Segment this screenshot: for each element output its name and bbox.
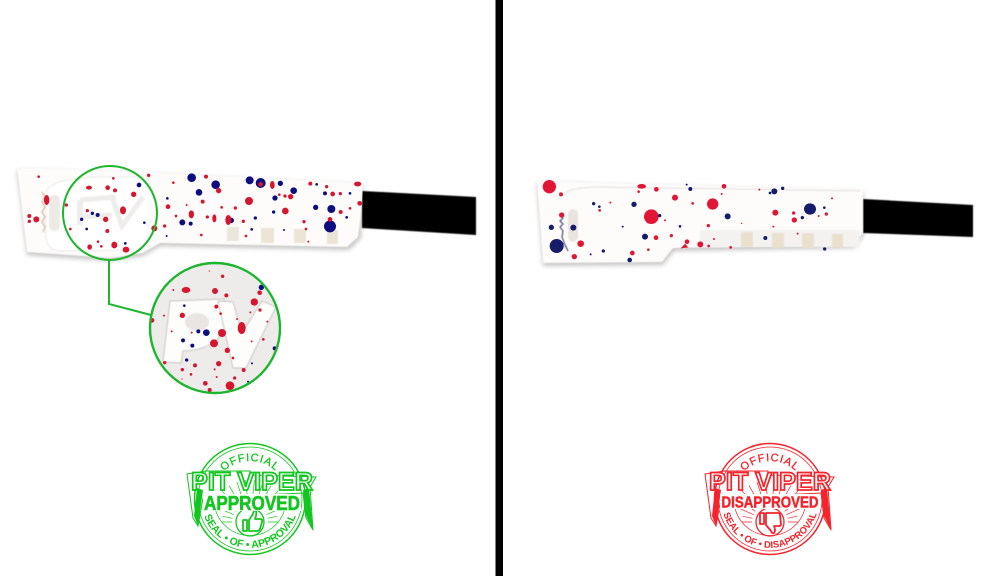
Pit Viper logo: PIT VIPER [709,468,831,496]
seal text: official: OFFICIAL [740,453,797,471]
PV relief letters [163,299,276,368]
black band [362,191,476,235]
clip body [537,181,863,263]
approved seal [186,442,317,556]
panel: disapproved [535,180,974,556]
callout connector line [109,260,151,315]
seal text: official: OFFICIAL [220,453,277,471]
seal text: seal of disapproval: SEAL • OF • DISAPPROVAL [724,512,817,548]
panel: approved [15,165,477,556]
approved banner text: APPROVED [204,493,300,515]
moulded ridge and slots [560,187,860,251]
moulded ridge and slots [42,177,338,251]
divider [496,0,503,576]
disapproved product: lightly splattered clip with black band [537,180,973,266]
Pit Viper logo: PIT VIPER [191,468,313,496]
seal text: seal of approval: SEAL • OF • APPROVAL [204,514,296,548]
disapproved banner: DISAPPROVED [722,494,818,512]
paint splatter [28,174,362,252]
sunburst and inner ring [732,480,808,536]
clip body [17,168,363,258]
sunburst and inner ring [212,480,288,536]
icon: thumbs up [243,510,262,531]
icon: thumbs down [760,513,781,533]
approved product: splattered white clip with black band [17,168,476,261]
inset splatter [150,270,277,392]
disapproved seal [704,442,835,556]
magnifier circle on clip [63,166,157,260]
zoomed inset: PV logo close-up [150,263,280,393]
black band [863,199,973,237]
paint splatter [543,180,833,262]
